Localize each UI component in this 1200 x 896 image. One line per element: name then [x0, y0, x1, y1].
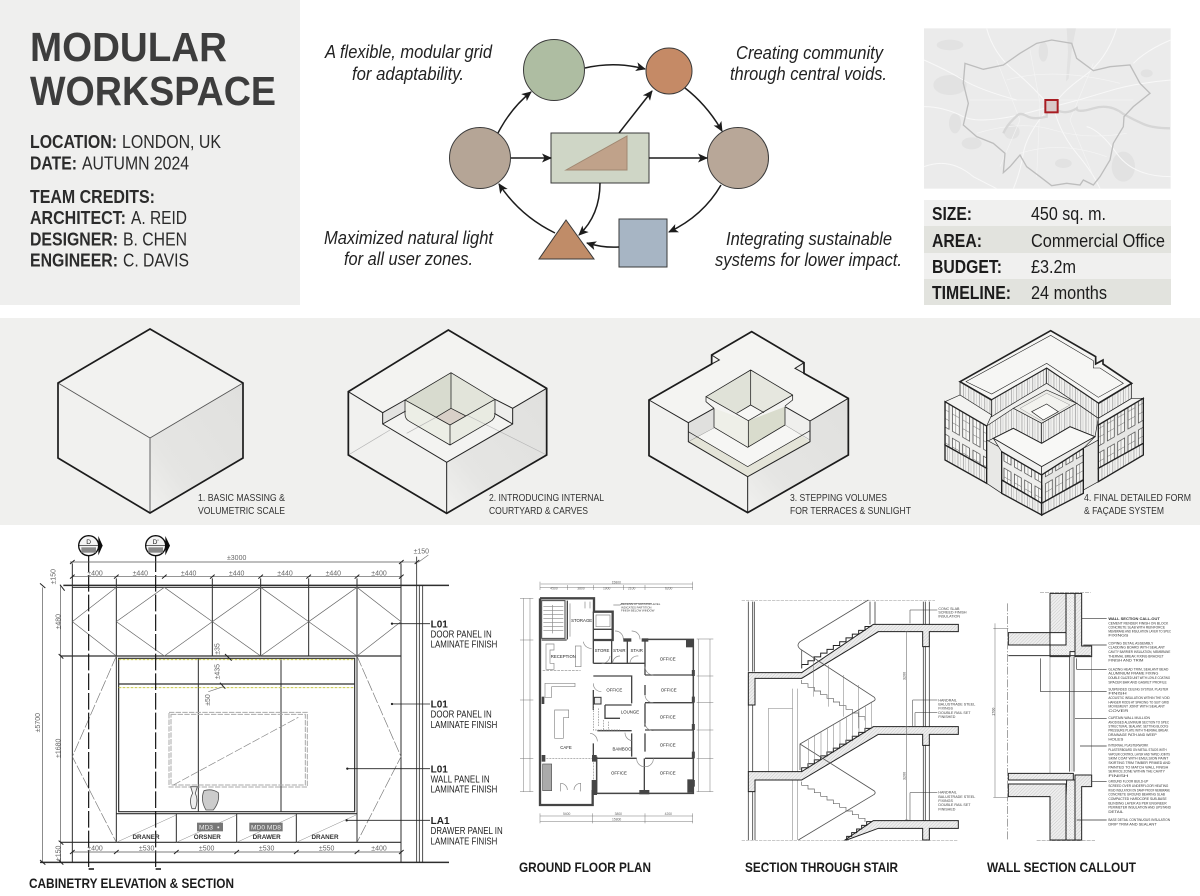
wall section notes: GLAZING HEAD TRIM, SEALANT BEAD	[1108, 666, 1168, 671]
wall section notes: CONCRETE GROUND BEARING SLAB	[1108, 792, 1165, 797]
stair slabs	[748, 624, 958, 840]
dimension labels: ±150	[50, 569, 57, 584]
floor plan room labels: OFFICE	[660, 742, 676, 747]
stair annotations: FIXINGS	[938, 707, 954, 711]
dimension labels: ±35	[214, 643, 221, 655]
massing step 3: 3. STEPPING VOLUMES	[790, 492, 887, 504]
stair annotations: DOUBLE RAIL SET	[938, 711, 971, 715]
dimension labels: ±440	[277, 570, 293, 577]
massing step 2: COURTYARD & CARVES	[489, 505, 588, 517]
stair section drawing	[742, 600, 975, 875]
stair annotations: BALUSTRADE STEEL	[938, 703, 975, 707]
material callouts: LAMINATE FINISH	[431, 836, 497, 847]
team credits: ARCHITECT:	[30, 207, 126, 228]
concept captions: Integrating sustainable	[726, 229, 892, 249]
wall section notes: VAPOUR CONTROL LAYER AND TAPED JOINTS	[1108, 751, 1170, 756]
massing step 4: & FAÇADE SYSTEM	[1084, 505, 1164, 517]
team credits: TEAM CREDITS:	[30, 186, 155, 207]
concept captions: for all user zones.	[344, 249, 473, 269]
panel: massing evolution	[0, 318, 1200, 525]
location and date: LOCATION:	[30, 131, 117, 152]
drawer labels: DRAWER	[253, 834, 281, 841]
dimension labels: ±550	[319, 846, 335, 853]
dimension labels: ±50	[205, 694, 212, 706]
material callouts	[345, 619, 503, 847]
massing step 3	[649, 332, 911, 517]
wall section notes: ANODISED ALUMINIUM SECTION TO SPEC	[1108, 719, 1169, 724]
drawer labels: MD3	[199, 824, 213, 831]
ground floor plan drawing	[519, 580, 713, 875]
project data table: TIMELINE:	[932, 282, 1011, 303]
stair annotations: CONC SLAB	[938, 607, 960, 611]
dimension labels: ±530	[259, 846, 275, 853]
massing step 2	[348, 330, 604, 517]
material callouts: L01	[431, 619, 448, 630]
material callouts: LAMINATE FINISH	[431, 785, 497, 796]
dimension labels: ±150	[56, 845, 63, 861]
elevation title: CABINETRY ELEVATION & SECTION	[29, 875, 234, 891]
dimension labels: ±5700	[35, 713, 42, 732]
stair annotations: BALUSTRADE STEEL	[938, 795, 975, 799]
wall section notes: THERMAL BREAK FIXING BRACKET	[1108, 653, 1164, 658]
concept captions	[324, 42, 902, 270]
location and date: LONDON, UK	[122, 131, 221, 152]
team credits: B. CHEN	[123, 228, 187, 250]
wall section notes: DRIP TRIM AND SEALANT	[1108, 821, 1157, 826]
massing step 1	[58, 329, 285, 517]
team credits: DESIGNER:	[30, 228, 118, 250]
team credits: ENGINEER:	[30, 250, 118, 270]
location and date	[30, 131, 221, 174]
decorative objects: vase and sculpture	[190, 787, 219, 810]
floor plan room labels: CAFE	[560, 745, 572, 750]
wall section notes: SPACER BAR AND GASKET PROFILE	[1108, 679, 1167, 684]
wall section notes: ACOUSTIC INSULATION WITHIN THE VOID	[1108, 695, 1170, 700]
section markers: D	[86, 539, 91, 546]
team credits	[30, 186, 189, 270]
wall section notes: FINISH AND TRIM	[1108, 657, 1143, 662]
ground floor plan drawing: INDICATES PARTITION	[621, 605, 651, 609]
wall section notes: CLADDING BOARD WITH SEALANT	[1108, 645, 1165, 650]
wall section notes	[1108, 616, 1171, 826]
wall section notes: COPING DETAIL ASSEMBLY	[1108, 641, 1154, 646]
dimension labels: ±1680	[56, 739, 63, 758]
drawer labels: DRANER	[311, 834, 339, 841]
dimension labels: ±400	[87, 846, 103, 853]
title: MODULAR	[30, 24, 227, 70]
project data table: Commercial Office	[1031, 230, 1165, 251]
floor plan walls	[540, 598, 693, 805]
stair annotations	[903, 607, 975, 811]
wall section notes: DRAINAGE PATH AND WEEP	[1108, 732, 1157, 737]
wall section dimension: 1700	[991, 708, 995, 716]
ground floor plan drawing: 15800	[612, 818, 621, 822]
dimension labels: ±400	[87, 570, 103, 577]
dimension labels: ±3000	[227, 555, 246, 562]
massing step 2: 2. INTRODUCING INTERNAL	[489, 492, 604, 504]
dimension labels: ±400	[371, 570, 387, 577]
wall section notes: FINISH	[1108, 773, 1129, 778]
material callouts: LA1	[431, 816, 450, 827]
massing step 3: FOR TERRACES & SUNLIGHT	[790, 505, 911, 517]
ground floor plan drawing: 15800	[612, 580, 621, 584]
project data table: 24 months	[1031, 282, 1107, 303]
material callouts: WALL PANEL IN	[431, 774, 490, 785]
floor plan room labels: OFFICE	[611, 771, 627, 776]
wall section notes: PERIMETER INSULATION AND UPSTAND	[1108, 805, 1171, 810]
concept captions: systems for lower impact.	[715, 250, 902, 270]
wall section notes: PLASTERBOARD ON METAL STUDS WITH	[1108, 747, 1167, 752]
stair annotations: 3200	[903, 672, 907, 680]
stair annotations: FINISHED	[938, 715, 956, 719]
material callouts: DOOR PANEL IN	[431, 629, 492, 640]
location and date: DATE:	[30, 152, 77, 174]
project data table: BUDGET:	[932, 256, 1002, 277]
wall section notes: COMPACTED HARDCORE SUB-BASE	[1108, 796, 1167, 801]
wall section notes: MOVEMENT JOINT WITH SEALANT	[1108, 704, 1165, 709]
ground floor plan drawing: 3800	[615, 812, 622, 816]
wall section notes: MEMBRANE AND INSULATION LAYER TO SPEC	[1108, 629, 1171, 634]
drawer labels: ORSNER	[194, 834, 221, 841]
wall section notes: HOLES	[1108, 736, 1124, 741]
stair annotations: FINISHED	[938, 807, 956, 811]
wall section notes: GROUND FLOOR BUILD-UP	[1108, 779, 1149, 784]
panel: project info	[0, 0, 300, 305]
concept captions: through central voids.	[730, 64, 887, 84]
project data table	[924, 200, 1171, 305]
stair annotations: HANDRAIL	[938, 699, 957, 703]
stair annotations: INSULATION	[938, 614, 960, 618]
wall section notes: HANGER RODS AT SPACING TO SUIT GRID	[1108, 699, 1169, 704]
floor plan room labels: RECEPTION	[551, 654, 576, 659]
floor plan room labels: OFFICE	[660, 657, 676, 662]
wall section notes: SCREED OVER UNDERFLOOR HEATING	[1108, 783, 1168, 788]
floor plan room labels	[551, 618, 677, 776]
stair annotations: FIXINGS	[938, 799, 954, 803]
wall section notes: SKIRTING TRIM TIMBER PRIMED AND	[1108, 760, 1170, 765]
concept captions: A flexible, modular grid	[324, 42, 493, 62]
project data table: SIZE:	[932, 203, 972, 224]
stair annotations: DOUBLE RAIL SET	[938, 803, 971, 807]
wall section notes: COVER	[1108, 708, 1128, 713]
ground floor plan drawing: FINISH BELOW WINDOW	[621, 609, 655, 613]
wall section notes: STRUCTURAL SEALANT, SETTING BLOCKS	[1108, 723, 1169, 728]
title	[30, 24, 276, 114]
floor plan fixtures	[543, 602, 653, 791]
concept diagram	[450, 40, 768, 267]
wall section notes: ALUMINIUM FRAME FIXING	[1108, 671, 1158, 676]
wall section title: WALL SECTION CALLOUT	[987, 859, 1136, 875]
project data table: AREA:	[932, 230, 982, 251]
floor plan room labels: STORE	[595, 648, 610, 653]
dimension labels: ±440	[229, 570, 245, 577]
dimension labels: ±435	[214, 664, 221, 679]
floor plan title: GROUND FLOOR PLAN	[519, 859, 651, 875]
floor plan room labels: STAIR	[630, 648, 643, 653]
floor plan room labels: OFFICE	[606, 687, 622, 692]
wall section notes: SERVICE ZONE WITHIN THE CAVITY	[1108, 769, 1165, 774]
floor plan room labels: LOUNGE	[621, 709, 639, 714]
concept captions: Creating community	[736, 43, 884, 63]
wall section notes: INTERNAL PLASTERWORK	[1108, 743, 1149, 748]
wall section notes: DETAIL	[1108, 809, 1124, 814]
wall section notes: CAVITY BARRIER INSULATION, MEMBRANE	[1108, 649, 1171, 654]
floor plan room labels: OFFICE	[661, 688, 677, 693]
material callouts: DRAWER PANEL IN	[431, 826, 503, 837]
wall section notes: PAINTED TO MATCH WALL FINISH	[1108, 764, 1168, 769]
wall section notes: PRESSURE PLATE WITH THERMAL BREAK	[1108, 728, 1169, 733]
concept captions: Maximized natural light	[324, 228, 494, 248]
stair flights	[798, 600, 937, 840]
drawer labels: ▪	[217, 824, 220, 831]
wall section notes: BASE DETAIL CONTINUOUS INSULATION	[1108, 817, 1170, 822]
ground floor plan drawing: 5400	[563, 812, 571, 816]
floor plan room labels: BAMBOO	[612, 746, 632, 751]
floor plan room labels: OFFICE	[660, 715, 676, 720]
project data table: £3.2m	[1031, 256, 1076, 277]
dimension labels: ±440	[326, 570, 341, 577]
drawer labels: MD0 MD8	[251, 824, 281, 831]
dimension labels: ±480	[56, 614, 63, 629]
wall section notes: CURTAIN WALL MULLION	[1108, 715, 1150, 720]
stair annotations: SCREED FINISH	[938, 611, 967, 615]
ground floor plan drawing: 2100	[628, 586, 636, 590]
dimension labels: ±500	[199, 846, 215, 853]
dimension labels	[35, 549, 429, 861]
wall section notes: SKIM COAT WITH EMULSION PAINT	[1108, 756, 1169, 761]
wall section notes: SUSPENDED CEILING SYSTEM, PLASTER	[1108, 686, 1168, 691]
dimension labels: ±150	[414, 549, 429, 556]
massing step 4	[945, 331, 1191, 517]
ground floor plan drawing: 1900	[603, 586, 611, 590]
material callouts: DOOR PANEL IN	[431, 710, 492, 721]
ground floor plan drawing: 4200	[665, 812, 672, 816]
stair title: SECTION THROUGH STAIR	[745, 859, 898, 875]
wall section notes: CONCRETE SLAB WITH REINFORCE	[1108, 624, 1165, 629]
material callouts: L01	[431, 700, 448, 711]
wall section notes: FINISH	[1108, 691, 1127, 696]
material callouts: LAMINATE FINISH	[431, 720, 497, 731]
ground floor plan drawing: 3800	[577, 586, 585, 590]
team credits: C. DAVIS	[123, 250, 189, 270]
ground floor plan drawing: 6200	[665, 586, 673, 590]
dimension labels: ±530	[139, 846, 155, 853]
stair annotations: 3200	[903, 772, 907, 780]
ground floor plan drawing: RECEIVE AT GROUND LEVEL	[621, 602, 661, 606]
dimension labels: ±440	[181, 570, 197, 577]
massing step 1: 1. BASIC MASSING &	[198, 492, 285, 504]
dimension labels: ±440	[133, 570, 148, 577]
team credits: A. REID	[131, 207, 187, 228]
floor plan room labels: OFFICE	[660, 771, 676, 776]
section markers: D'	[153, 539, 159, 546]
wall section drawing	[987, 593, 1171, 875]
ground floor plan drawing: 4500	[550, 586, 558, 590]
section markers	[79, 536, 170, 556]
material callouts: L01	[431, 764, 448, 775]
wall section notes: CEMENT RENDER FINISH ON BLOCK	[1108, 620, 1169, 625]
wall section notes: BLINDING LAYER AS PER ENGINEER	[1108, 800, 1167, 805]
material callouts: LAMINATE FINISH	[431, 640, 497, 651]
massing step 1: VOLUMETRIC SCALE	[198, 505, 285, 517]
title: WORKSPACE	[30, 68, 276, 114]
cabinetry elevation drawing	[29, 536, 503, 891]
drawer labels: DRANER	[132, 834, 160, 841]
wall section notes: DOUBLE GLAZED UNIT WITH LOW-E COATING	[1108, 675, 1170, 680]
dimension labels: ±400	[371, 846, 387, 853]
location and date: AUTUMN 2024	[82, 152, 189, 174]
drawer labels	[132, 823, 339, 841]
location map: London	[924, 28, 1171, 189]
floor plan room labels: STAIR	[613, 648, 626, 653]
concept captions: for adaptability.	[352, 64, 464, 84]
wall section notes: FIXINGS	[1108, 633, 1129, 638]
floor plan room labels: STORAGE	[571, 618, 592, 623]
stair annotations: HANDRAIL	[938, 791, 957, 795]
wall section notes: WALL SECTION CALL-OUT	[1108, 616, 1160, 621]
project data table: 450 sq. m.	[1031, 203, 1106, 224]
